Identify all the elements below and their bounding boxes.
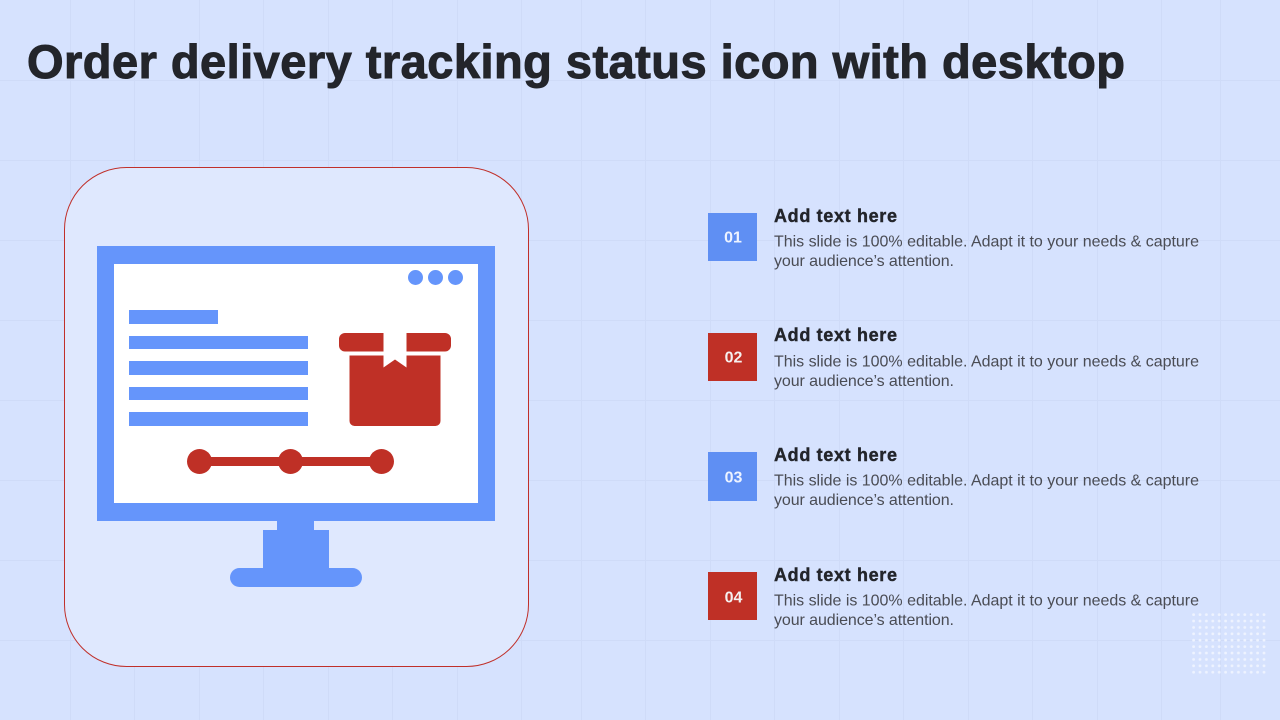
description 01: This slide is 100% editable. Adapt it to your needs & capture [774, 234, 1199, 250]
list item 03 [708, 445, 1199, 509]
panel: desktop illustration [64, 168, 528, 666]
badge 04 [708, 572, 757, 620]
heading 03: Add text here [774, 445, 897, 465]
description 04: your audience’s attention. [774, 612, 954, 629]
text lines [129, 310, 308, 426]
badge 03 [708, 452, 757, 501]
list item 02 [708, 325, 1199, 390]
description 01: your audience’s attention. [774, 253, 954, 270]
decorative dot grid [1192, 613, 1267, 674]
badge 02: 02 [725, 350, 742, 366]
badge 01 [708, 213, 757, 261]
badge 04: 04 [725, 590, 742, 606]
list item 04 [708, 565, 1199, 629]
heading 02: Add text here [774, 325, 897, 345]
description 03: your audience’s attention. [774, 492, 954, 509]
icon: parcel box [339, 333, 451, 426]
title: Order delivery tracking status icon with desktop [27, 35, 1125, 88]
description 04: This slide is 100% editable. Adapt it to your needs & capture [774, 592, 1199, 610]
description 03: This slide is 100% editable. Adapt it to your needs & capture [774, 472, 1199, 490]
icon: window dots [408, 270, 463, 285]
description 02: your audience’s attention. [774, 373, 954, 390]
badge 02 [708, 333, 757, 381]
badge 01: 01 [724, 230, 742, 246]
badge 03: 03 [725, 470, 742, 486]
icon: tracking progress line [187, 449, 394, 474]
heading 04: Add text here [774, 565, 897, 585]
icon: desktop monitor [97, 246, 495, 587]
heading 01: Add text here [774, 206, 897, 226]
list item 01 [708, 206, 1199, 270]
description 02: This slide is 100% editable. Adapt it to your needs & capture [774, 354, 1199, 370]
